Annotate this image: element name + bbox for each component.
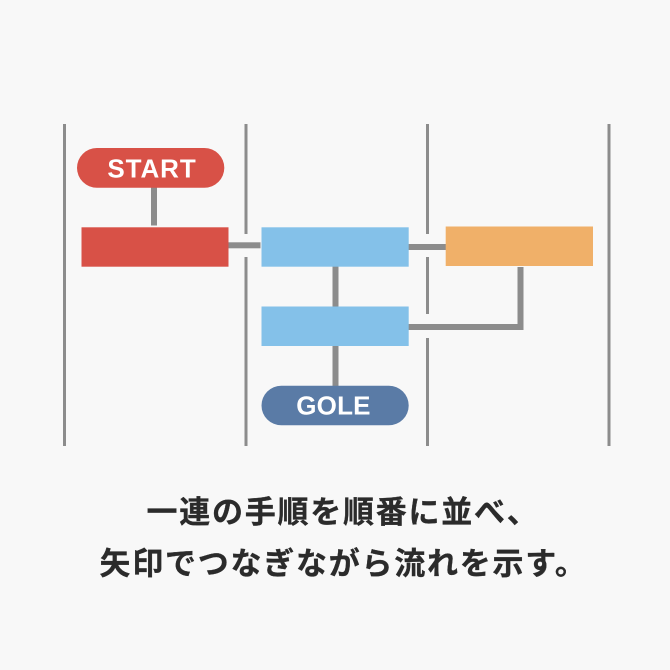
goal pill [262, 386, 409, 425]
step: blue box [262, 227, 409, 267]
step: orange box [446, 226, 593, 266]
start pill [77, 148, 224, 188]
connector: orange step elbow to lower blue step [408, 267, 520, 327]
caption [100, 495, 588, 582]
connector: blue step to orange step [408, 244, 446, 250]
connector: start to first step [151, 187, 157, 226]
caption: 矢印でつなぎながら流れを示す。 [100, 546, 588, 582]
step: lower blue box [262, 306, 409, 346]
connector: red step to blue step [228, 242, 260, 248]
step: red box [82, 227, 228, 267]
start pill: START [107, 154, 197, 184]
caption: 一連の手順を順番に並べ、 [146, 495, 540, 530]
lane dividers [63, 124, 610, 446]
goal pill: GOLE [296, 390, 371, 420]
connector: blue step to lower blue step [332, 266, 338, 307]
connector: lower blue step to goal [332, 345, 338, 386]
